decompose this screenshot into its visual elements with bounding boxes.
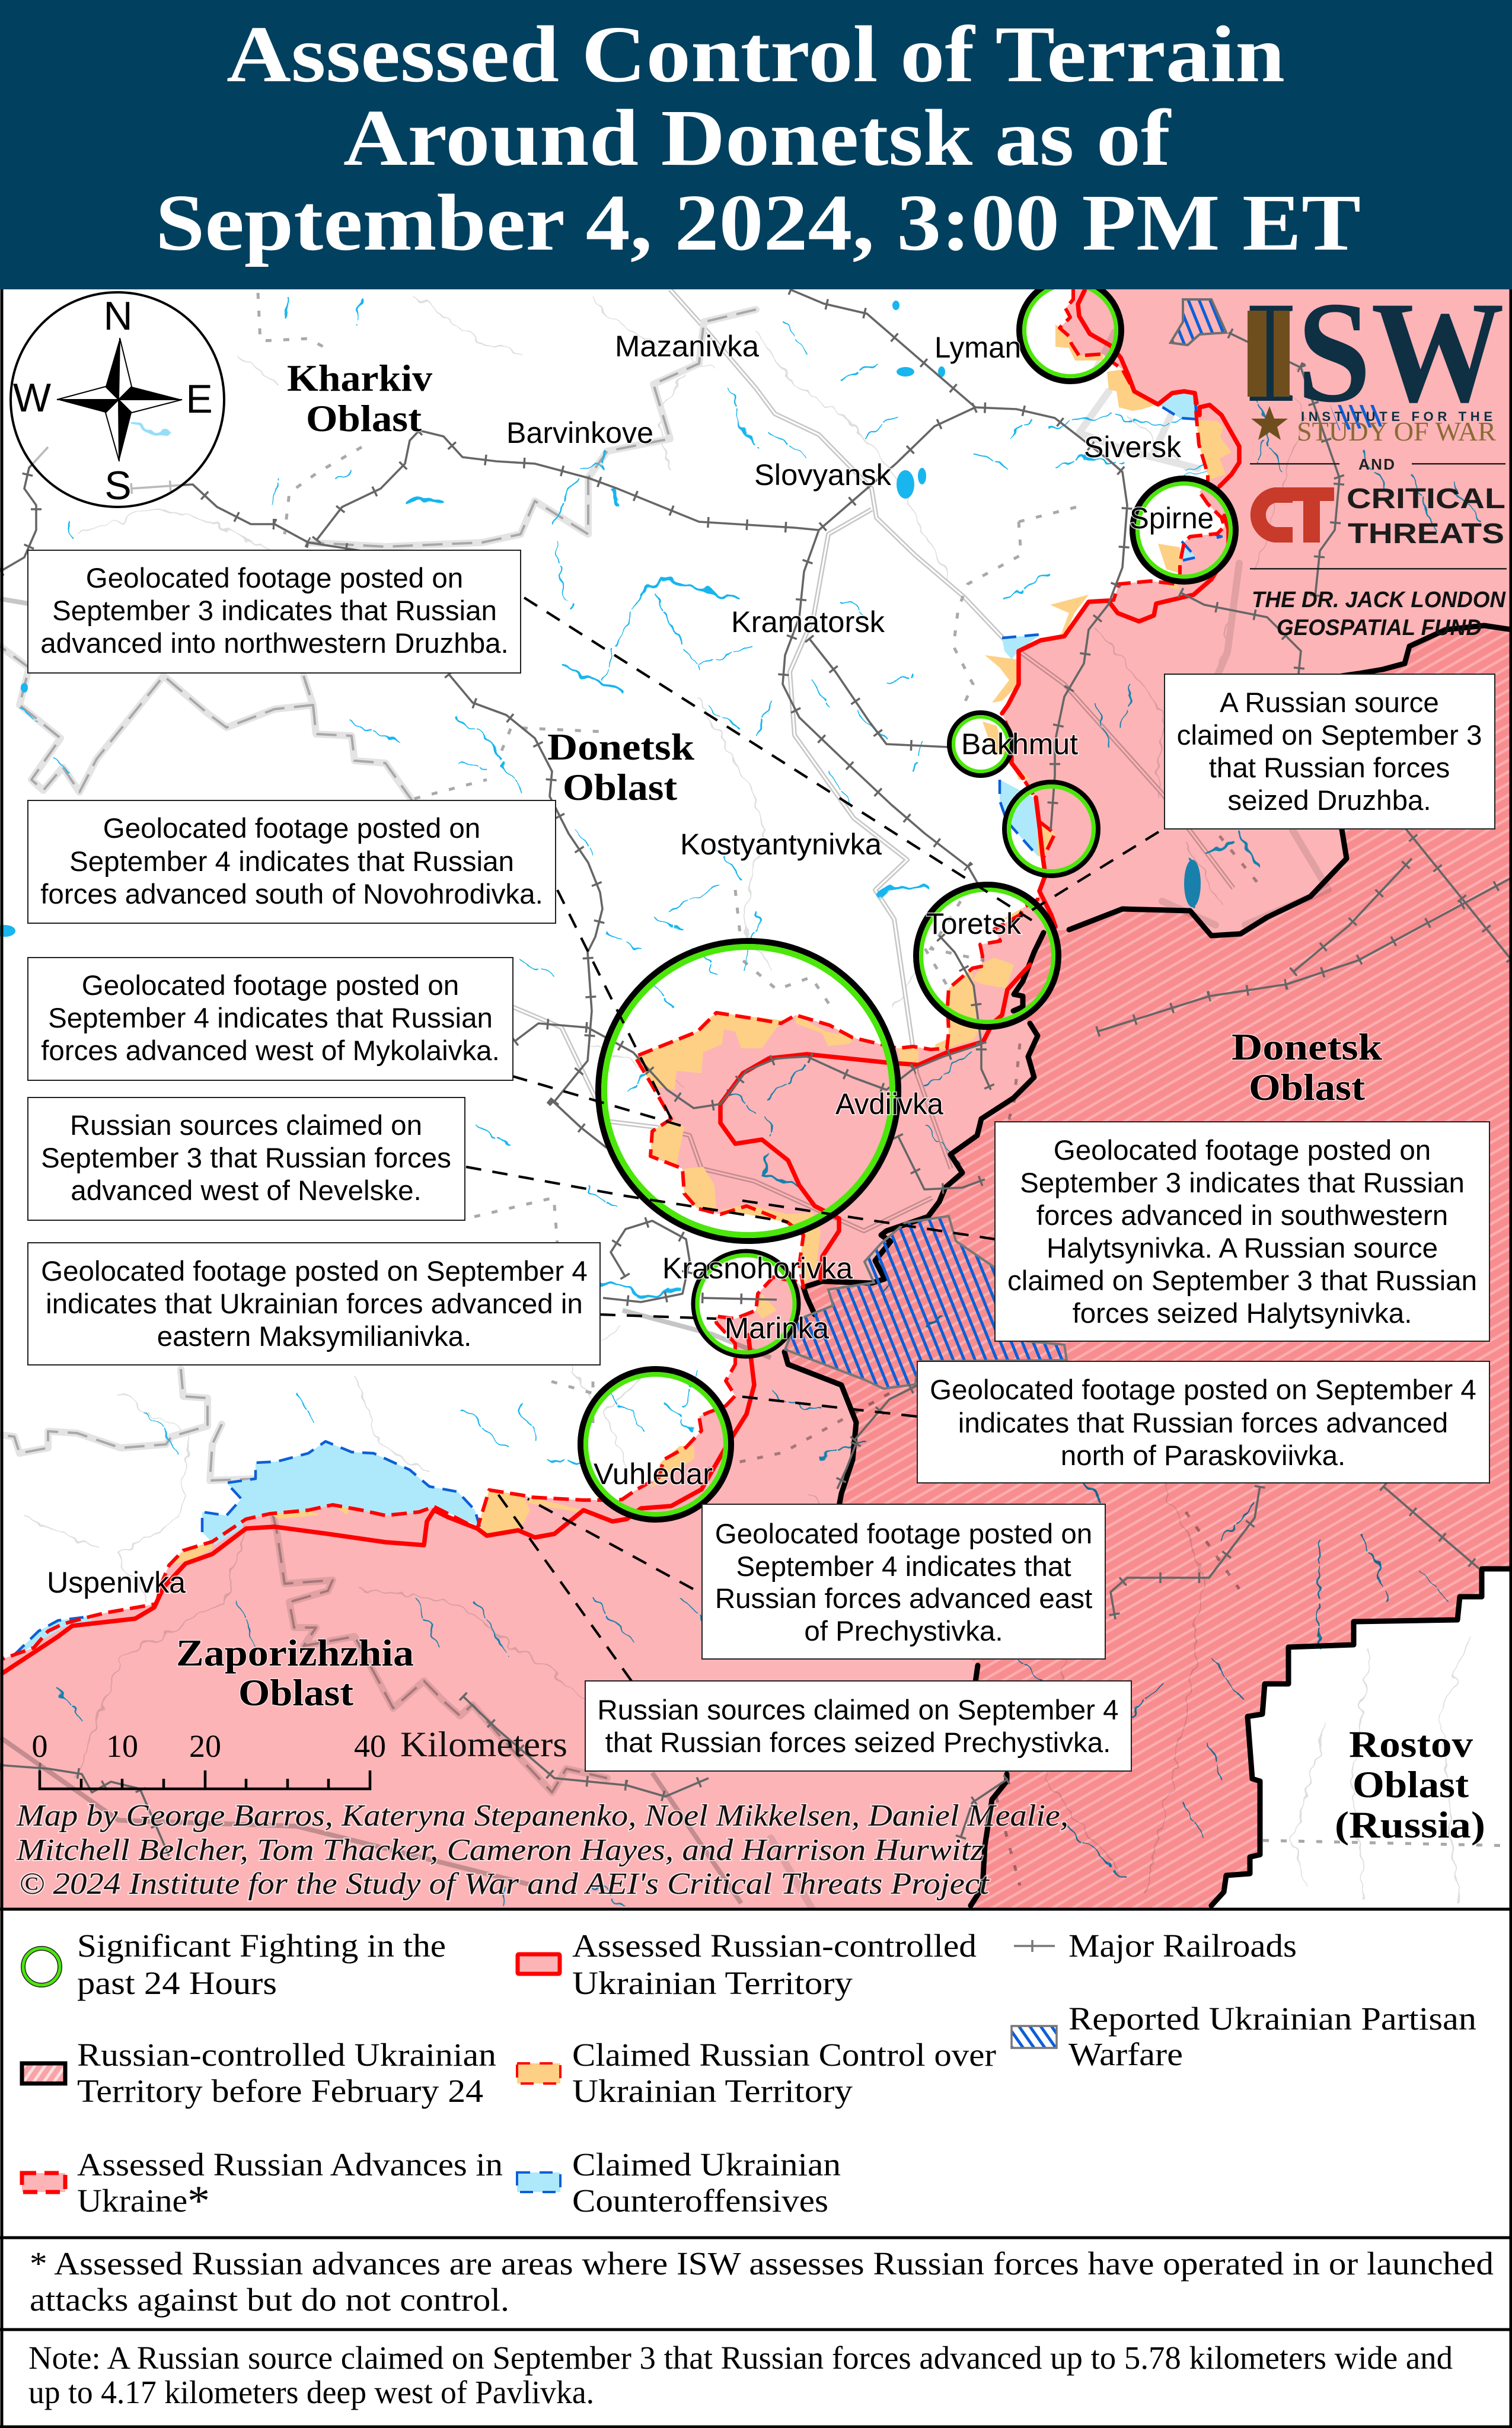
legend item: claimed Russian control: Claimed Russian Control over bbox=[572, 2037, 996, 2073]
callout: Prechystivka seized bbox=[585, 1681, 1131, 1771]
title banner: Around Donetsk as of bbox=[343, 94, 1172, 183]
scale bar: 10 bbox=[106, 1728, 138, 1764]
callout: Mykolaivka bbox=[28, 958, 513, 1080]
callout: Halytsynivka: forces seized Halytsynivka. bbox=[1073, 1298, 1412, 1329]
oblast label: Zaporizhzhia: Oblast bbox=[238, 1671, 354, 1714]
ISW and Critical Threats logos: CRITICAL bbox=[1347, 483, 1505, 515]
title banner: September 4, 2024, 3:00 PM ET bbox=[155, 178, 1361, 267]
callout: Paraskoviivka bbox=[917, 1361, 1489, 1483]
assessed Russian advances (red dashed edge) bbox=[2, 289, 1224, 1659]
place labels: Uspenivka bbox=[47, 1566, 186, 1599]
place labels: Kostyantynivka bbox=[680, 828, 882, 861]
compass rose: N bbox=[103, 293, 133, 339]
map credits: Mitchell Belcher, Tom Thacker, Cameron Hayes, and Harrison Hurwitz bbox=[16, 1833, 984, 1867]
place labels: Mazanivka bbox=[615, 330, 759, 363]
place labels: Bakhmut bbox=[961, 728, 1078, 761]
callout: Prechystivka seized: that Russian forces seized Prechystivka. bbox=[605, 1727, 1111, 1759]
legend item: significant fighting: Significant Fighting in the bbox=[77, 1928, 446, 1964]
occupation line (black boundary) bbox=[784, 626, 1512, 1906]
callout: Mykolaivka: forces advanced west of Mykolaivka. bbox=[41, 1035, 500, 1067]
oblast label: Rostov: Rostov bbox=[1349, 1723, 1473, 1765]
place labels: Kramatorsk bbox=[731, 605, 885, 639]
callout: Maksymilianivka bbox=[28, 1243, 600, 1365]
legend item: assessed Russian advances: Ukraine bbox=[77, 2183, 182, 2219]
legend item: Russian-controlled before February 24 bbox=[22, 2037, 496, 2109]
oblast label: Rostov: (Russia) bbox=[1335, 1804, 1485, 1846]
place labels: Barvinkove bbox=[506, 416, 653, 449]
map background bbox=[0, 289, 1512, 1909]
callout: Nevelske: advanced west of Nevelske. bbox=[71, 1175, 422, 1207]
oblast label: Donetsk (east): Donetsk bbox=[1232, 1026, 1382, 1068]
scale bar bbox=[32, 1725, 567, 1789]
callout: Prechystivka east: September 4 indicates that bbox=[736, 1551, 1071, 1582]
assessed Russian control line (thick red) bbox=[2, 289, 1239, 1673]
note: Pavlivka claim bbox=[28, 2340, 1453, 2410]
callout: Halytsynivka: claimed on September 3 that Russian bbox=[1007, 1265, 1477, 1297]
oblast label: Rostov: Oblast bbox=[1352, 1763, 1469, 1805]
legend item: assessed Russian-controlled territory: Ukrainian Territory bbox=[572, 1965, 853, 2001]
place labels: Krasnohorivka bbox=[662, 1252, 853, 1285]
ISW and Critical Threats logos: THREATS bbox=[1348, 518, 1504, 550]
legend item: reported Ukrainian partisan warfare bbox=[1012, 2001, 1476, 2072]
callout: Druzhba northwestern advance bbox=[28, 550, 521, 673]
callout: Mykolaivka: September 4 indicates that Russian bbox=[48, 1003, 493, 1034]
callout: Prechystivka east bbox=[702, 1504, 1105, 1659]
legend panel bbox=[0, 1909, 1512, 2428]
oblast label: Donetsk (east): Oblast bbox=[1249, 1066, 1366, 1108]
note: Pavlivka claim: Note: A Russian source claimed on September 3 that Russian forces advanced up to 5.78 kilometers wide and bbox=[28, 2340, 1453, 2376]
oblast label: Donetsk (west) bbox=[547, 726, 694, 808]
legend item: claimed Russian control bbox=[517, 2037, 996, 2109]
scale bar: 20 bbox=[189, 1728, 221, 1764]
callout: Prechystivka east: Geolocated footage posted on bbox=[715, 1518, 1092, 1550]
legend item: reported Ukrainian partisan warfare: Reported Ukrainian Partisan bbox=[1068, 2001, 1476, 2037]
callout: Halytsynivka: September 3 indicates that Russian bbox=[1020, 1167, 1465, 1199]
legend item: assessed Russian advances: Assessed Russian Advances in bbox=[77, 2146, 503, 2183]
compass rose bbox=[11, 292, 224, 508]
callout: Druzhba seized claim: claimed on September 3 bbox=[1177, 720, 1482, 751]
major railroads bbox=[0, 289, 1512, 1856]
callout: Novohrodivka: September 4 indicates that Russian bbox=[69, 846, 514, 878]
compass rose: W bbox=[13, 375, 51, 420]
place labels: Marinka bbox=[725, 1312, 829, 1345]
scale bar: 40 bbox=[354, 1728, 386, 1764]
oblast label: Donetsk (west): Donetsk bbox=[547, 726, 694, 768]
callout: Druzhba seized claim: that Russian forces bbox=[1209, 752, 1450, 784]
legend item: claimed Ukrainian counteroffensives: Claimed Ukrainian bbox=[572, 2146, 841, 2183]
significant fighting circle: Lyman bbox=[1019, 279, 1121, 381]
note: Pavlivka claim: up to 4.17 kilometers deep west of Pavlivka. bbox=[28, 2374, 594, 2410]
legend item: assessed Russian advances: * bbox=[187, 2177, 210, 2225]
callout: Druzhba northwestern advance: advanced into northwestern Druzhba. bbox=[40, 628, 509, 659]
place labels bbox=[47, 330, 1214, 1599]
oblast label: Kharkiv bbox=[287, 357, 432, 439]
callout: Halytsynivka: forces advanced in southwestern bbox=[1036, 1200, 1448, 1231]
callout: Novohrodivka: Geolocated footage posted on bbox=[103, 813, 480, 844]
ISW and Critical Threats logos: INSTITUTE FOR THE bbox=[1301, 409, 1492, 424]
place labels: Avdiivka bbox=[835, 1087, 943, 1121]
claimed Russian control (orange areas) bbox=[169, 324, 1232, 1565]
callout: Paraskoviivka: indicates that Russian forces advanced bbox=[958, 1408, 1448, 1439]
legend item: claimed Russian control: Ukrainian Territory bbox=[572, 2073, 853, 2109]
ISW and Critical Threats logos: STUDY OF WAR bbox=[1297, 416, 1496, 446]
callout: Maksymilianivka: Geolocated footage posted on September 4 bbox=[41, 1256, 588, 1287]
callout: Novohrodivka bbox=[28, 800, 556, 923]
legend item: reported Ukrainian partisan warfare: Warfare bbox=[1068, 2036, 1183, 2072]
map base layer: rivers, roads and oblast borders bbox=[0, 289, 1482, 1909]
territory occupied before February 24 (hatched) bbox=[784, 626, 1512, 1909]
callout: Nevelske: Russian sources claimed on bbox=[70, 1110, 422, 1141]
significant fighting circle: Vuhledar bbox=[580, 1369, 731, 1520]
legend item: assessed Russian advances bbox=[22, 2146, 503, 2225]
callout: Prechystivka east: Russian forces advanced east bbox=[715, 1583, 1092, 1615]
map credits bbox=[16, 1799, 1068, 1901]
significant fighting circle: Spirne bbox=[1133, 478, 1236, 582]
place labels: Spirne bbox=[1130, 502, 1214, 535]
reported Ukrainian partisan warfare areas (blue hatching) bbox=[785, 299, 1383, 1389]
callout: Prechystivka seized: Russian sources claimed on September 4 bbox=[597, 1695, 1119, 1726]
legend item: significant fighting: past 24 Hours bbox=[77, 1965, 277, 2001]
callout: Druzhba northwestern advance: September 3 indicates that Russian bbox=[52, 595, 497, 627]
oblast label: Rostov bbox=[1335, 1723, 1485, 1846]
callout: Halytsynivka bbox=[995, 1122, 1489, 1341]
significant fighting circle: Bakhmut bbox=[949, 713, 1012, 776]
footnote: assessed Russian advances: attacks against but do not control. bbox=[30, 2282, 509, 2318]
significant fighting circle: Avdiivka bbox=[598, 941, 898, 1241]
oblast label: Zaporizhzhia bbox=[176, 1632, 414, 1714]
title banner: Assessed Control of Terrain bbox=[227, 10, 1285, 99]
footnote: assessed Russian advances: * Assessed Russian advances are areas where ISW assesses Russian forces have operated in or launched bbox=[30, 2245, 1494, 2282]
ISW and Critical Threats logos: THE DR. JACK LONDON bbox=[1252, 588, 1507, 612]
legend item: major railroads: Major Railroads bbox=[1068, 1928, 1297, 1964]
title banner bbox=[0, 0, 1512, 289]
callout: Druzhba seized claim: seized Druzhba. bbox=[1227, 785, 1431, 816]
compass rose: S bbox=[104, 463, 132, 508]
ISW and Critical Threats logos: GEOSPATIAL FUND bbox=[1277, 615, 1482, 640]
callout: Mykolaivka: Geolocated footage posted on bbox=[82, 970, 459, 1001]
legend item: claimed Ukrainian counteroffensives: Counteroffensives bbox=[572, 2183, 828, 2219]
callout: Nevelske: September 3 that Russian forces bbox=[41, 1143, 451, 1174]
callout leader lines bbox=[466, 598, 1159, 1681]
place labels: Siversk bbox=[1084, 430, 1182, 464]
map credits: Map by George Barros, Kateryna Stepanenko, Noel Mikkelsen, Daniel Mealie, bbox=[16, 1799, 1068, 1833]
claimed Ukrainian counteroffensives (light blue areas) bbox=[14, 391, 1221, 1655]
callout: Druzhba northwestern advance: Geolocated footage posted on bbox=[86, 563, 463, 594]
legend item: Russian-controlled before February 24: Territory before February 24 bbox=[77, 2073, 483, 2109]
legend item: claimed Ukrainian counteroffensives bbox=[517, 2146, 841, 2219]
oblast label: Kharkiv: Kharkiv bbox=[287, 357, 432, 399]
significant fighting circle: Marinka bbox=[693, 1251, 799, 1357]
callout: Druzhba seized claim: A Russian source bbox=[1220, 687, 1439, 719]
callout: Prechystivka east: of Prechystivka. bbox=[804, 1616, 1003, 1647]
place labels: Toretsk bbox=[926, 907, 1022, 940]
scale bar: 0 bbox=[32, 1728, 47, 1764]
legend item: Russian-controlled before February 24: Russian-controlled Ukrainian bbox=[77, 2037, 496, 2073]
oblast label: Zaporizhzhia: Zaporizhzhia bbox=[176, 1632, 414, 1674]
Russian-controlled territory (pink) bbox=[0, 289, 1512, 1909]
callout: Maksymilianivka: indicates that Ukrainian forces advanced in bbox=[46, 1288, 583, 1320]
place labels: Vuhledar bbox=[594, 1457, 713, 1491]
callout: Nevelske bbox=[28, 1097, 465, 1220]
place labels: Slovyansk bbox=[754, 458, 892, 492]
callout: Novohrodivka: forces advanced south of Novohrodivka. bbox=[40, 879, 543, 910]
oblast label: Donetsk (east) bbox=[1232, 1026, 1382, 1108]
callout: Maksymilianivka: eastern Maksymilianivka. bbox=[157, 1321, 471, 1352]
callout: Druzhba seized claim bbox=[1165, 674, 1495, 829]
footnote: assessed Russian advances bbox=[30, 2245, 1494, 2318]
scale bar: Kilometers bbox=[400, 1725, 567, 1764]
oblast label: Donetsk (west): Oblast bbox=[563, 766, 678, 808]
oblast label: Kharkiv: Oblast bbox=[306, 397, 422, 439]
legend item: assessed Russian-controlled territory: Assessed Russian-controlled bbox=[572, 1928, 977, 1964]
significant fighting circle: Toretsk bbox=[916, 885, 1058, 1027]
ISW and Critical Threats logos bbox=[1245, 272, 1507, 640]
callout: Paraskoviivka: north of Paraskoviivka. bbox=[1061, 1440, 1345, 1472]
callout: Halytsynivka: Geolocated footage posted on bbox=[1054, 1135, 1431, 1166]
map credits: © 2024 Institute for the Study of War and AEI's Critical Threats Project bbox=[19, 1867, 990, 1901]
compass rose: E bbox=[186, 377, 213, 422]
ISW and Critical Threats logos: AND bbox=[1358, 455, 1395, 473]
place labels: Lyman bbox=[934, 331, 1021, 364]
callout: Halytsynivka: Halytsynivka. A Russian source bbox=[1047, 1233, 1438, 1264]
legend item: assessed Russian-controlled territory bbox=[518, 1928, 977, 2001]
legend item: significant fighting bbox=[23, 1928, 446, 2001]
Russian oblast border dotted line bbox=[1263, 1840, 1512, 1846]
callout: Paraskoviivka: Geolocated footage posted on September 4 bbox=[930, 1374, 1476, 1406]
significant fighting circle: Druzhba bbox=[1004, 782, 1098, 876]
